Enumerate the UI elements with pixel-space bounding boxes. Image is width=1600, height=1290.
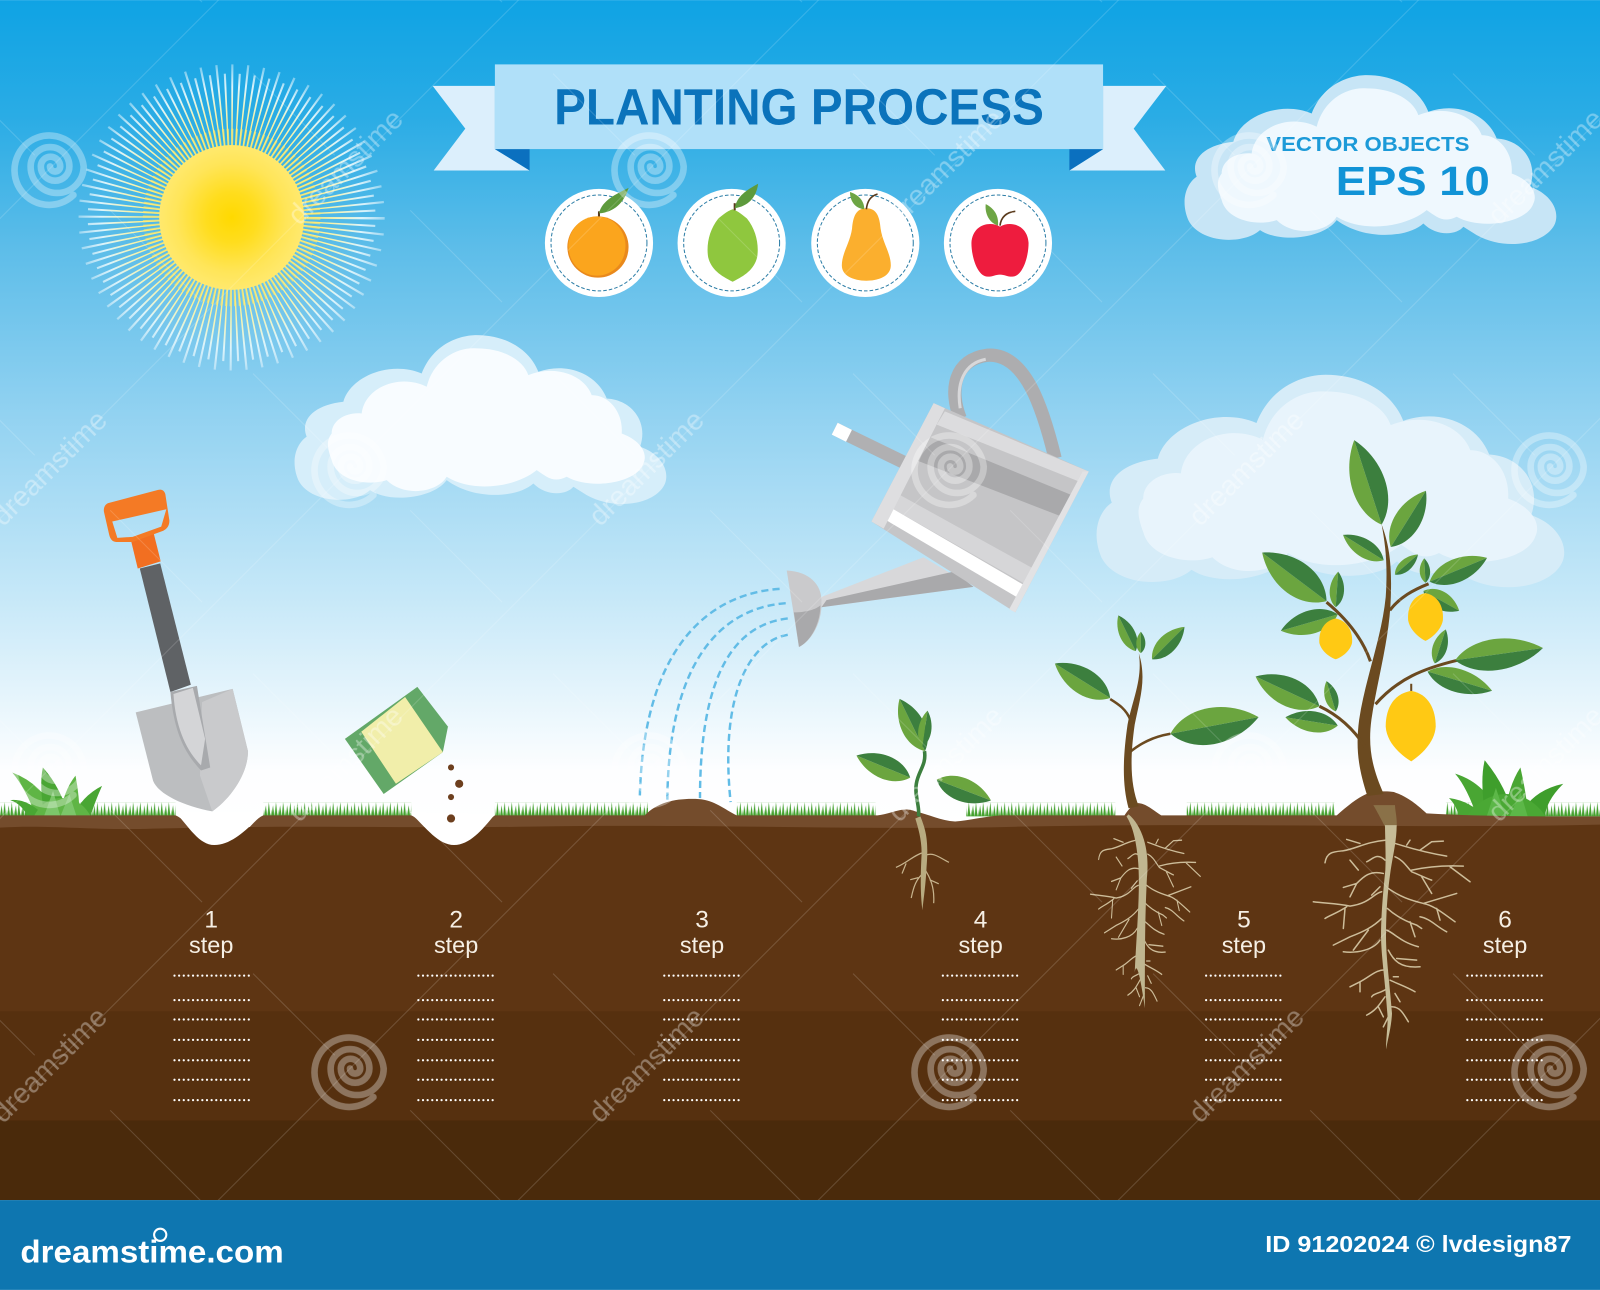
watermark overlay: dreamstime (882, 700, 1010, 828)
watermark overlay: dreamstime (583, 404, 711, 532)
step 4: 4 (974, 907, 987, 934)
dotted lines (418, 976, 495, 1100)
step 3: 3 (695, 907, 709, 934)
plant stage 4: seedling (852, 694, 995, 910)
sun (119, 105, 344, 330)
step 1: 1 (204, 907, 218, 934)
title text: PLANTING PROCESS (554, 79, 1044, 136)
grass tuft: right (1449, 760, 1563, 819)
vector objects label: VECTOR OBJECTS (1266, 134, 1469, 156)
watermark overlay: dreamstime (1183, 1001, 1311, 1129)
footer logo text: dreamstime.com (20, 1233, 284, 1269)
roots (896, 852, 949, 903)
step 6: 6 (1498, 907, 1512, 934)
plant stage 6: fruit tree (1250, 435, 1545, 1049)
icon: orange (545, 188, 653, 297)
cloud: top right with text (1185, 75, 1556, 244)
dotted lines (943, 976, 1019, 1100)
title banner (433, 64, 1166, 171)
dotted lines (664, 976, 741, 1100)
step 3 (664, 907, 741, 1100)
plant stage 5: young tree (1048, 612, 1262, 1008)
step 5: step (1222, 932, 1266, 958)
step 2: step (434, 932, 478, 958)
watermark overlay: dreamstime (882, 103, 1010, 231)
icon row: fruits (545, 184, 1052, 297)
watering can (787, 355, 1089, 647)
step 5: 5 (1237, 907, 1251, 934)
image id: ID 91202024 © lvdesign87 (1265, 1231, 1571, 1257)
step 5 (1206, 907, 1283, 1100)
cloud: behind tree (1097, 375, 1564, 587)
sky background (0, 0, 1600, 829)
watermark overlay: dreamstime (282, 700, 410, 828)
step 6: step (1483, 932, 1527, 958)
step 4: step (958, 932, 1003, 958)
step 1: step (189, 932, 233, 958)
grass strips (0, 802, 1600, 816)
lemons (1319, 593, 1443, 761)
EPS 10 label: EPS 10 (1336, 158, 1490, 204)
watering can water arcs (640, 589, 788, 802)
icon: apple (944, 189, 1052, 297)
watermark overlay: dreamstime (583, 1001, 711, 1129)
icon: lime (678, 184, 786, 297)
step 3: step (680, 932, 724, 958)
soil: top layer with holes and mounds (0, 791, 1600, 845)
shovel (104, 490, 248, 811)
planting hole: step 2 (410, 812, 495, 845)
step 2: 2 (449, 907, 463, 934)
dotted lines (1206, 976, 1283, 1100)
soil: main layers (0, 825, 1600, 1200)
seed packet (345, 687, 448, 794)
step 4 (943, 907, 1019, 1100)
grass tuft: left (10, 767, 102, 819)
dotted lines (174, 976, 251, 1100)
watermark overlay: dreamstime (282, 103, 410, 231)
step 2 (418, 907, 495, 1100)
watermark overlay: dreamstime (1183, 404, 1311, 532)
step 1 (174, 907, 251, 1100)
footer logo spiral (154, 1229, 166, 1241)
step 6 (1467, 907, 1544, 1100)
tap root (1373, 805, 1397, 1049)
seeds (447, 764, 463, 823)
cloud: centre left (295, 335, 666, 504)
planting hole: step 1 (176, 812, 263, 845)
icon: pear (811, 189, 919, 297)
dotted lines (1467, 976, 1544, 1100)
footer bar (0, 1200, 1600, 1290)
